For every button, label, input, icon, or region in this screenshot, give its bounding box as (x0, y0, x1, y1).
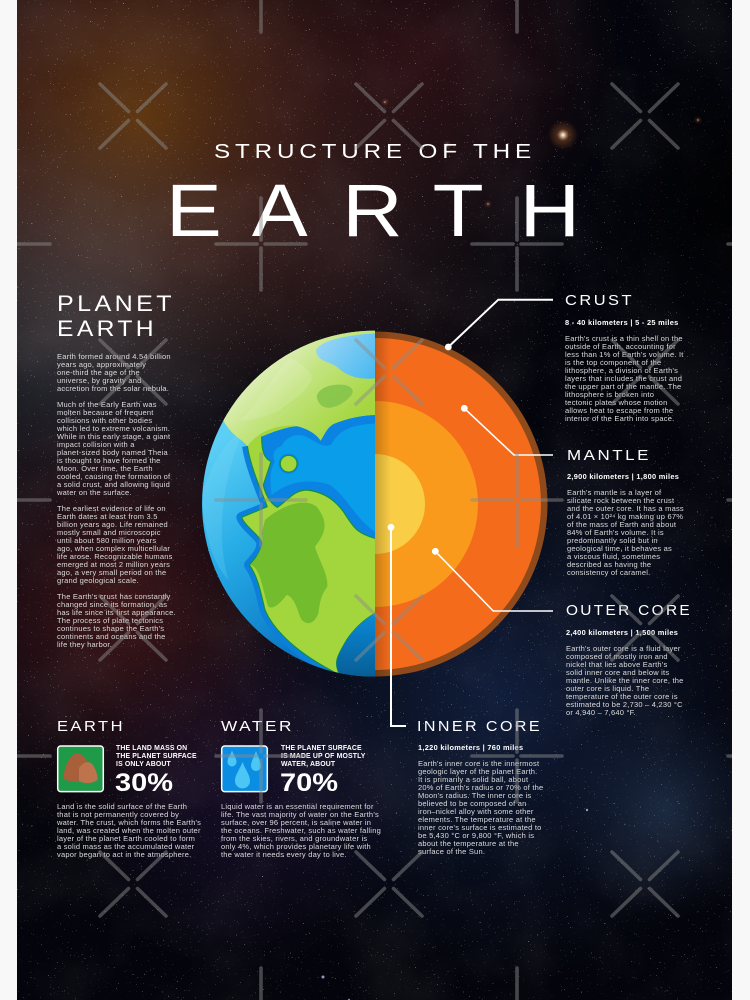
heading: inner core: INNER CORE (417, 719, 542, 735)
text block: land description: land, was created when the molten outer (57, 826, 201, 835)
text block: planet earth description: cooled, causing the formation of (57, 472, 171, 481)
text block: inner core: geologic layer of the planet Earth. (418, 767, 537, 776)
heading: planet earth (57, 291, 175, 341)
stat text: water surface: IS MADE UP OF MOSTLY (281, 753, 366, 760)
icon: water drops (222, 746, 267, 792)
text block: outer core: estimated to be 2,730 – 4,230 °C (566, 700, 683, 709)
text block: planet earth description: universe, by gravity and (57, 376, 142, 385)
text block: water description (221, 802, 381, 859)
text block: planet earth description: a solid crust, and allowing liquid (57, 480, 170, 489)
text block: inner core: Moon's radius. The inner core is (418, 791, 531, 800)
text block: outer core (566, 644, 684, 717)
text block: outer core: Earth's outer core is a fluid layer (566, 644, 681, 653)
text block: inner core: believed to be composed of an (418, 799, 527, 808)
text block: inner core: elements. The temperature at the (418, 815, 536, 824)
panel: earth land stat (56, 719, 201, 859)
measurement: outer core: 2,400 kilometers | 1,500 miles (566, 628, 678, 637)
leader line: inner core (388, 524, 406, 726)
text block: planet earth description: years ago, approximately (57, 360, 146, 369)
text block: land description (56, 802, 201, 859)
text block: planet earth description: continents and oceans and the (57, 632, 166, 641)
panel: crust (565, 293, 684, 423)
panel: planet earth intro (56, 291, 176, 649)
top sea (316, 333, 375, 379)
leader line: mantle (461, 405, 553, 455)
measurement: mantle: 2,900 kilometers | 1,800 miles (567, 472, 679, 481)
earth diagram (190, 300, 553, 726)
text block: planet earth description: has life since its first appearance. (57, 608, 176, 617)
coast shelf band (236, 446, 346, 674)
text block: planet earth description: continues to shape the Earth's (57, 624, 164, 633)
text block: planet earth description: changed since its formation, as (57, 600, 167, 609)
text block: outer core: nickel that lies above Earth's (566, 660, 667, 669)
text block: crust: allows heat to escape from the (565, 406, 673, 415)
stat text: land mass: THE LAND MASS ON (116, 745, 187, 752)
text block: land description: water. The crust, which forms the Earth's (56, 818, 201, 827)
text block: land description: vapor began to act in the atmosphere. (57, 850, 191, 859)
text block: mantle: a viscous fluid, sometimes (567, 552, 660, 561)
text block: land description: Land is the solid surface of the Earth (57, 802, 187, 811)
text block: planet earth description: water on the surface. (56, 488, 132, 497)
stat value: 70 percent: 70% (280, 769, 338, 797)
text block: planet earth description: emerged at most 2 million years (57, 560, 170, 569)
island (279, 454, 299, 474)
text block: water description: from the skies, rivers, and groundwater is (221, 834, 367, 843)
text block: inner core: be 5,430 °C or 9,800 °F, which is (418, 831, 534, 840)
stat text: water surface (281, 745, 366, 768)
text block: water description: the water it needs every day to live. (221, 850, 347, 859)
text block: crust: lithosphere, a division of Earth's (565, 366, 678, 375)
stat text: water surface: THE PLANET SURFACE (281, 745, 362, 752)
text block: water description: only 4%, which provides planetary life with (221, 842, 371, 851)
bottom sea (336, 614, 375, 676)
text block: planet earth description: The process of plate tectonics (57, 616, 163, 625)
text block: outer core: solid inner core and below its (566, 668, 669, 677)
land (223, 330, 375, 673)
heading: planet earth: EARTH (57, 316, 157, 341)
layer: crust (375, 332, 548, 676)
text block: mantle: Earth's mantle is a layer of (567, 488, 662, 497)
text block: planet earth description: accretion from the solar nebula. (57, 384, 169, 393)
text block: crust (565, 334, 684, 423)
text block: crust: lithosphere is broken into (565, 390, 654, 399)
stat value: 30 percent: 30% (115, 769, 173, 797)
text block: crust: is the top component of the (565, 358, 661, 367)
heading: outer core: OUTER CORE (566, 603, 692, 619)
text block: land description: layer of the planet Earth cooled to form (57, 834, 195, 843)
text block: inner core: It is primarily a solid ball, about (418, 775, 529, 784)
text block: planet earth description: mostly small and microscopic (57, 528, 161, 537)
text block: planet earth description: until about 580 million years (57, 536, 156, 545)
text block: planet earth description: ago, a very small period on the (57, 568, 166, 577)
text block: inner core: about the temperature at the (418, 839, 519, 848)
text block: crust: outside of Earth, accounting for (565, 342, 676, 351)
text block: mantle: consistency of caramel. (567, 568, 650, 577)
text block: land description: a solid mass as the accumulated water (57, 842, 195, 851)
text block: planet earth description: molten because of frequent (57, 408, 154, 417)
layer: outer core (375, 401, 478, 607)
panel: inner core (417, 719, 543, 856)
text block: planet earth description: planet-sized body named Theia (57, 448, 169, 457)
dark land interior (250, 503, 327, 623)
text block: inner core: inner core's surface is estimated to (418, 823, 542, 832)
panel: mantle (567, 448, 684, 577)
text block: water description: life. The vast majority of water on the Earth's (221, 810, 379, 819)
text block: planet earth description: The earliest evidence of life on (57, 504, 166, 513)
layer: mantle (375, 338, 541, 670)
text block: planet earth description: Earth formed around 4.54 billion (57, 352, 171, 361)
stat text: land mass: THE PLANET SURFACE (116, 753, 197, 760)
text block: crust: less than 1% of Earth's volume. It (565, 350, 684, 359)
panel: outer core (566, 603, 692, 717)
text block: inner core: surface of the Sun. (418, 847, 485, 856)
text block: inner core: 20% of Earth's radius or 70% of the (418, 783, 543, 792)
text block: water description: surface, over 96 percent, is saline water in (221, 818, 371, 827)
text block: mantle: described as having the (567, 560, 651, 569)
text block: crust: tectonic plates whose motion (565, 398, 667, 407)
layer: inner core (375, 454, 425, 554)
text block: mantle: of the mass of Earth and about (567, 520, 677, 529)
text block: inner core: iron–nickel alloy with some other (418, 807, 534, 816)
text block: mantle: silicate rock between the crust (567, 496, 675, 505)
text block: outer core: outer core is liquid. The (566, 684, 649, 693)
inland sea (262, 423, 375, 532)
text block: crust: Earth's crust is a thin shell on the (565, 334, 683, 343)
title (166, 141, 580, 252)
text block: planet earth description: life they harbor. (57, 640, 112, 649)
text block: mantle: predominantly solid but in (567, 536, 658, 545)
text block: mantle: and the outer core. It has a mass (567, 504, 684, 513)
leader line: crust (445, 300, 553, 350)
text block: planet earth description: life arose. Recognizable humans (57, 552, 173, 561)
text block: inner core (418, 759, 543, 856)
title line: earth: EARTH (166, 169, 580, 252)
text block: water description: Liquid water is an essential requirement for (221, 802, 374, 811)
text block: planet earth description: is thought to have formed the (57, 456, 161, 465)
stat text: water surface: WATER, ABOUT (281, 761, 336, 768)
text block: planet earth description: impact collision with a (57, 440, 135, 449)
text block: planet earth description: collisions with other bodies (57, 416, 152, 425)
text block: mantle: 84% of Earth's volume. It is (567, 528, 664, 537)
text block: inner core: Earth's inner core is the innermost (418, 759, 540, 768)
text block: water description: the oceans. Freshwater, such as water falling (221, 826, 381, 835)
text block: planet earth description: Much of the Early Earth was (57, 400, 157, 409)
text block: planet earth description: Moon. Over time, the Earth (57, 464, 153, 473)
text block: mantle: geological time, it behaves as (567, 544, 672, 553)
text block: planet earth description: Earth dates at least from 3.5 (57, 512, 158, 521)
text block: outer core: mantle. Unlike the inner core, the (566, 676, 684, 685)
text block: planet earth description: The Earth's crust has constantly (57, 592, 171, 601)
globe cutaway: right half layers (375, 331, 548, 677)
stat text: land mass (116, 745, 197, 768)
stat text: land mass: IS ONLY ABOUT (116, 761, 172, 768)
text block: planet earth description: billion years ago. Life remained (57, 520, 168, 529)
text block: crust: layers that includes the crust and (565, 374, 682, 383)
heading: water: WATER (221, 719, 294, 735)
text block: planet earth description (56, 352, 176, 649)
text block: planet earth description: While in this early stage, a giant (57, 432, 171, 441)
text block: land description: that is not permanently covered by (57, 810, 179, 819)
text block: outer core: or 4,940 – 7,640 °F. (566, 708, 636, 717)
heading: earth: EARTH (57, 719, 125, 735)
text block: mantle (567, 488, 684, 577)
text block: crust: the upper part of the mantle. The (565, 382, 681, 391)
heading: planet earth: PLANET (57, 291, 175, 316)
text block: planet earth description: grand geological scale. (57, 576, 139, 585)
text block: planet earth description: ago, when complex multicellular (57, 544, 170, 553)
heading: mantle: MANTLE (567, 448, 651, 464)
leader line: outer core (432, 548, 553, 611)
icon: rocks (58, 746, 103, 792)
text block: crust: interior of the Earth into space. (565, 414, 674, 423)
text block: outer core: temperature of the outer core is (566, 692, 678, 701)
globe surface: left half (202, 330, 375, 677)
measurement: crust: 8 - 40 kilometers | 5 - 25 miles (565, 318, 679, 327)
text block: outer core: composed of mostly iron and (566, 652, 668, 661)
panel: water stat (221, 719, 381, 859)
title line: structure of the: STRUCTURE OF THE (214, 141, 536, 163)
measurement: inner core: 1,220 kilometers | 760 miles (418, 743, 523, 752)
text block: planet earth description: one-third the age of the (57, 368, 140, 377)
text block: planet earth description: which led to extreme volcanism. (56, 424, 170, 433)
text block: mantle: of 4.01 × 10²⁴ kg making up 67% (567, 512, 683, 521)
heading: crust: CRUST (565, 293, 634, 309)
